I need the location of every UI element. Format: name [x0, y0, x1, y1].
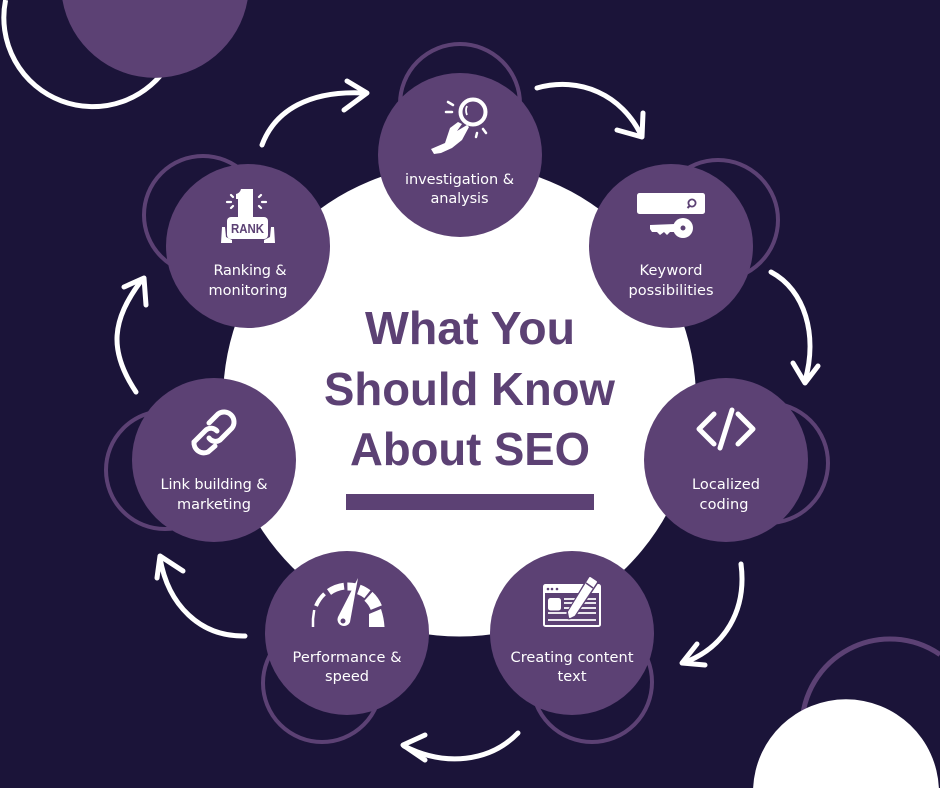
step: link building and marketing: [132, 378, 296, 542]
arrow: localized to creating: [682, 564, 742, 665]
step: performance and speed: [265, 551, 429, 715]
arrow: keyword to localized: [771, 272, 818, 383]
label: Keyword: [640, 263, 702, 279]
arrow: creating to performance: [403, 733, 518, 760]
label: speed: [325, 669, 369, 685]
label: Performance &: [292, 650, 402, 666]
arrow: performance to link building: [157, 556, 245, 636]
label: Localized: [692, 477, 760, 493]
arrow: link building to ranking: [117, 278, 146, 392]
icon: browser window with pencil: [544, 578, 600, 626]
title: [324, 302, 615, 475]
label: investigation &: [405, 172, 514, 188]
decoration: bottom-right white circle: [753, 699, 939, 788]
label: Creating content: [510, 650, 634, 666]
outline rings behind the steps: [106, 44, 828, 742]
title: About SEO: [350, 423, 590, 475]
decoration: bottom-right purple ring: [802, 639, 940, 727]
label: coding: [700, 497, 748, 513]
label: [208, 263, 288, 299]
step: investigation and analysis: [378, 73, 542, 237]
label: analysis: [430, 191, 488, 207]
step: ranking and monitoring: [166, 164, 330, 328]
decoration: top-left white ring: [4, 0, 170, 107]
step: localized coding: [644, 378, 808, 542]
icon: hand holding magnifying glass: [431, 100, 486, 154]
step: creating content text: [490, 551, 654, 715]
label: Ranking &: [214, 263, 286, 279]
label: marketing: [177, 497, 251, 513]
label: [405, 172, 514, 207]
label: monitoring: [208, 283, 288, 299]
label: possibilities: [628, 283, 714, 299]
arrow: ranking to investigation: [262, 81, 367, 145]
label: [692, 477, 760, 513]
icon: speedometer gauge: [313, 578, 384, 627]
arrow: investigation to keyword: [537, 84, 643, 137]
step: keyword possibilities: [589, 164, 753, 328]
label: text: [558, 669, 587, 685]
decoration: top-left purple circle: [62, 0, 248, 78]
label: [292, 650, 402, 685]
label: [510, 650, 634, 685]
icon: chain link: [194, 412, 234, 453]
label: [628, 263, 714, 299]
title underline bar: [346, 494, 594, 510]
label: Link building &: [160, 477, 268, 493]
central white circle: [223, 164, 696, 636]
icon: number one rank badge: [221, 189, 275, 243]
title: Should Know: [324, 363, 615, 415]
icon: code brackets: [699, 410, 753, 448]
title: What You: [365, 302, 575, 354]
icon: search bar and key: [637, 193, 705, 238]
label: [160, 477, 268, 513]
icon: number one rank badge: RANK: [231, 221, 265, 236]
